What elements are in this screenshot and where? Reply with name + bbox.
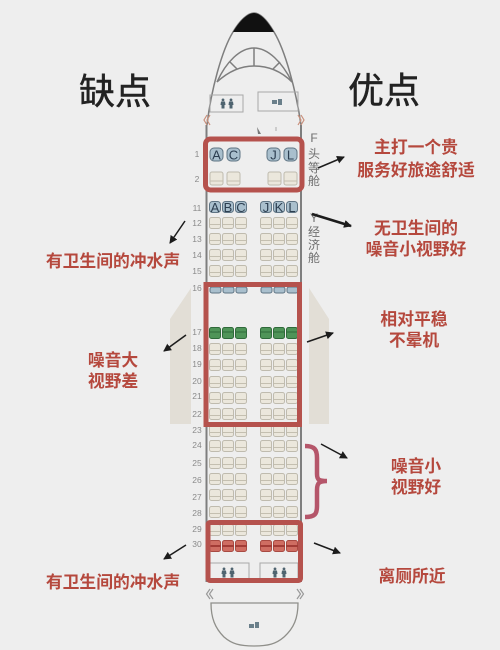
first class seats: A bbox=[212, 148, 221, 162]
first class seats: L bbox=[287, 148, 294, 162]
first class seats bbox=[210, 148, 297, 185]
row numbers: 14 bbox=[192, 250, 202, 260]
row numbers: 27 bbox=[192, 492, 202, 502]
row numbers: 30 bbox=[192, 539, 202, 549]
label: rows 24-28 pros: 视野好 bbox=[391, 478, 441, 497]
lavatory: rear left bbox=[209, 563, 249, 581]
row 16 seats bbox=[210, 287, 298, 293]
label: exit pros bbox=[380, 309, 448, 350]
row numbers: 2 bbox=[195, 174, 200, 184]
label: rows 24-28 pros bbox=[391, 456, 441, 497]
row numbers: 24 bbox=[192, 440, 202, 450]
row numbers: 25 bbox=[192, 458, 202, 468]
row numbers: 1 bbox=[195, 149, 200, 159]
economy row 11 seats: K bbox=[275, 200, 284, 215]
label: rear cons: 有卫生间的冲水声 bbox=[46, 573, 180, 592]
heading: pros: 优点 bbox=[348, 70, 420, 111]
tail bbox=[211, 603, 298, 646]
lavatory: rear right bbox=[260, 563, 298, 581]
arrows bbox=[164, 157, 351, 559]
label: row 11-15 pros: 噪音小视野好 bbox=[366, 239, 467, 259]
exit chevrons: front right bbox=[298, 115, 304, 125]
galley: front bbox=[258, 92, 298, 111]
label: first class pros bbox=[357, 137, 475, 180]
label: row 11-15 pros: 无卫生间的 bbox=[374, 219, 458, 238]
economy row 11 seats: C bbox=[236, 200, 246, 215]
label: exit pros: 不晕机 bbox=[389, 331, 439, 350]
row numbers: 28 bbox=[192, 508, 202, 518]
first class seats: J bbox=[270, 148, 277, 162]
row 30 red seats bbox=[209, 540, 298, 552]
economy row 11 seats: L bbox=[288, 200, 296, 215]
row numbers: 22 bbox=[192, 409, 202, 419]
class label: first: 舱 bbox=[308, 174, 320, 188]
fuselage bbox=[206, 13, 301, 582]
class label: economy: Y bbox=[310, 211, 318, 225]
class label: first: 头 bbox=[308, 147, 320, 161]
row numbers: 18 bbox=[192, 343, 202, 353]
economy rows 18-22 seats bbox=[210, 344, 298, 420]
bracket: rows 24-28 bbox=[305, 446, 327, 517]
exit chevrons: rear left bbox=[206, 589, 213, 599]
class label: economy: 舱 bbox=[308, 251, 320, 265]
row numbers: 17 bbox=[192, 327, 202, 337]
row numbers bbox=[192, 149, 202, 549]
galley: rear bbox=[249, 622, 259, 628]
exit chevrons: front left bbox=[204, 115, 210, 125]
class label: economy: 济 bbox=[308, 237, 320, 252]
label: rear pros: 离厕所近 bbox=[378, 566, 446, 586]
label: row 11-15 pros bbox=[366, 219, 467, 259]
first class seats: C bbox=[229, 148, 238, 162]
cockpit windows bbox=[217, 48, 292, 82]
label: exit cons: 视野差 bbox=[88, 371, 138, 391]
row numbers: 11 bbox=[193, 203, 202, 213]
economy row 11 seats bbox=[210, 200, 298, 215]
economy rows 23-29 seats bbox=[210, 426, 298, 536]
label: first class pros: 主打一个贵 bbox=[374, 137, 458, 157]
economy row 11 seats: B bbox=[224, 200, 232, 215]
class label: first: F bbox=[310, 131, 318, 145]
row numbers: 16 bbox=[192, 283, 202, 293]
row numbers: 21 bbox=[192, 391, 202, 401]
highlight: exit rows bbox=[206, 284, 300, 424]
front marks bbox=[257, 127, 276, 134]
row numbers: 20 bbox=[192, 376, 202, 386]
wing: left bbox=[170, 288, 191, 424]
highlight: first class bbox=[206, 139, 302, 190]
row numbers: 26 bbox=[192, 475, 202, 485]
row numbers: 15 bbox=[192, 266, 202, 276]
label: front cons: 有卫生间的冲水声 bbox=[46, 252, 180, 271]
class label: economy: 经 bbox=[308, 225, 320, 239]
wing: right bbox=[309, 288, 329, 424]
label: exit pros: 相对平稳 bbox=[380, 309, 448, 329]
heading: cons: 缺点 bbox=[79, 71, 151, 112]
class label: first: 等 bbox=[308, 161, 320, 175]
label: exit cons: 噪音大 bbox=[88, 350, 138, 370]
highlight: rear rows bbox=[208, 522, 300, 580]
lavatory: front bbox=[210, 95, 243, 112]
label: rows 24-28 pros: 噪音小 bbox=[391, 456, 441, 476]
row numbers: 23 bbox=[192, 425, 202, 435]
row numbers: 12 bbox=[192, 218, 202, 228]
row numbers: 13 bbox=[192, 234, 202, 244]
row numbers: 19 bbox=[192, 359, 202, 369]
row 17 green seats bbox=[210, 328, 298, 338]
label: first class pros: 服务好旅途舒适 bbox=[357, 160, 475, 180]
label: exit cons bbox=[88, 350, 138, 391]
economy row 11 seats: A bbox=[211, 200, 220, 215]
row numbers: 29 bbox=[192, 524, 202, 534]
economy rows 12-15 seats bbox=[210, 218, 298, 276]
nose tip bbox=[233, 13, 274, 32]
class label: first bbox=[308, 131, 320, 188]
class label: economy bbox=[308, 211, 320, 265]
exit chevrons: rear right bbox=[297, 589, 304, 599]
economy row 11 seats: J bbox=[263, 200, 269, 215]
